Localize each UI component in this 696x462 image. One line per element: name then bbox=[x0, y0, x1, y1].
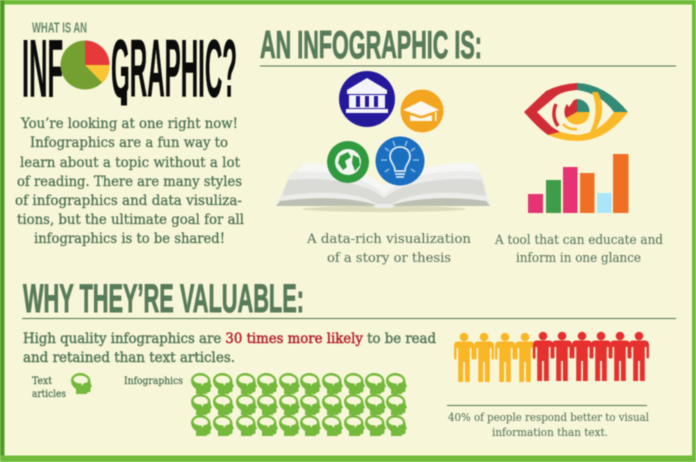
label: infographics: Infographics bbox=[124, 376, 183, 387]
icon: globe bbox=[327, 141, 369, 183]
caption: tool that can educate: inform in one glance bbox=[516, 251, 641, 266]
text block: 30 times more likely bbox=[23, 331, 436, 366]
icon: museum bbox=[339, 71, 395, 127]
label: text articles: articles bbox=[32, 389, 66, 400]
label: text articles bbox=[32, 376, 66, 400]
caption: tool that can educate: A tool that can educate and bbox=[494, 233, 663, 248]
icon: book bbox=[276, 163, 490, 212]
caption: 40 percent of people bbox=[447, 405, 649, 439]
pictogram: people 40 percent bbox=[454, 332, 649, 382]
icon: graduation cap bbox=[400, 90, 444, 132]
text block: introduction bbox=[15, 116, 244, 247]
pictogram: thirty heads bbox=[191, 373, 407, 436]
label: text articles: Text bbox=[32, 376, 52, 387]
icon: open book with circles bbox=[276, 71, 490, 212]
icon: eye with pie chart bbox=[524, 83, 628, 141]
text block: 30 times more likely: and retained than text articles. bbox=[23, 350, 235, 366]
caption: 40 percent of people: information than text. bbox=[492, 426, 608, 439]
text block: introduction: of reading. There are many styles bbox=[17, 174, 242, 190]
text block: introduction: tions, but the ultimate goal for all bbox=[17, 212, 244, 228]
title: what is an infographic bbox=[22, 20, 237, 114]
heading: why they're valuable: WHY THEY’RE VALUABLE: bbox=[23, 277, 304, 321]
text: GRAPHIC? bbox=[111, 24, 237, 114]
caption: tool that can educate bbox=[494, 233, 663, 266]
text block: introduction: learn about a topic without a lot bbox=[20, 155, 240, 171]
bar chart bbox=[528, 154, 628, 213]
icon: single head bbox=[71, 373, 92, 394]
title: what is an infographic: INF bbox=[22, 24, 63, 114]
icon: light bulb bbox=[376, 136, 424, 186]
text block: introduction: of infographics and data visuliza- bbox=[15, 193, 242, 209]
text block: introduction: Infographics are a fun way to bbox=[30, 135, 228, 151]
text block: 30 times more likely: High quality infographics are 30 times more likely to be read bbox=[23, 331, 436, 347]
heading: an infographic is: AN INFOGRAPHIC IS: bbox=[260, 24, 482, 67]
caption: data-rich visualization bbox=[306, 232, 472, 266]
caption: data-rich visualization: A data-rich visualization bbox=[306, 232, 472, 247]
icon: pie chart letter O bbox=[60, 40, 110, 90]
caption: 40 percent of people: 40% of people respond better to visual bbox=[448, 411, 649, 424]
text block: introduction: infographics is to be shared! bbox=[34, 231, 225, 247]
caption: data-rich visualization: of a story or thesis bbox=[327, 251, 451, 266]
title: what is an infographic: WHAT IS AN bbox=[32, 20, 87, 36]
text block: introduction: You’re looking at one right now! bbox=[20, 116, 238, 132]
